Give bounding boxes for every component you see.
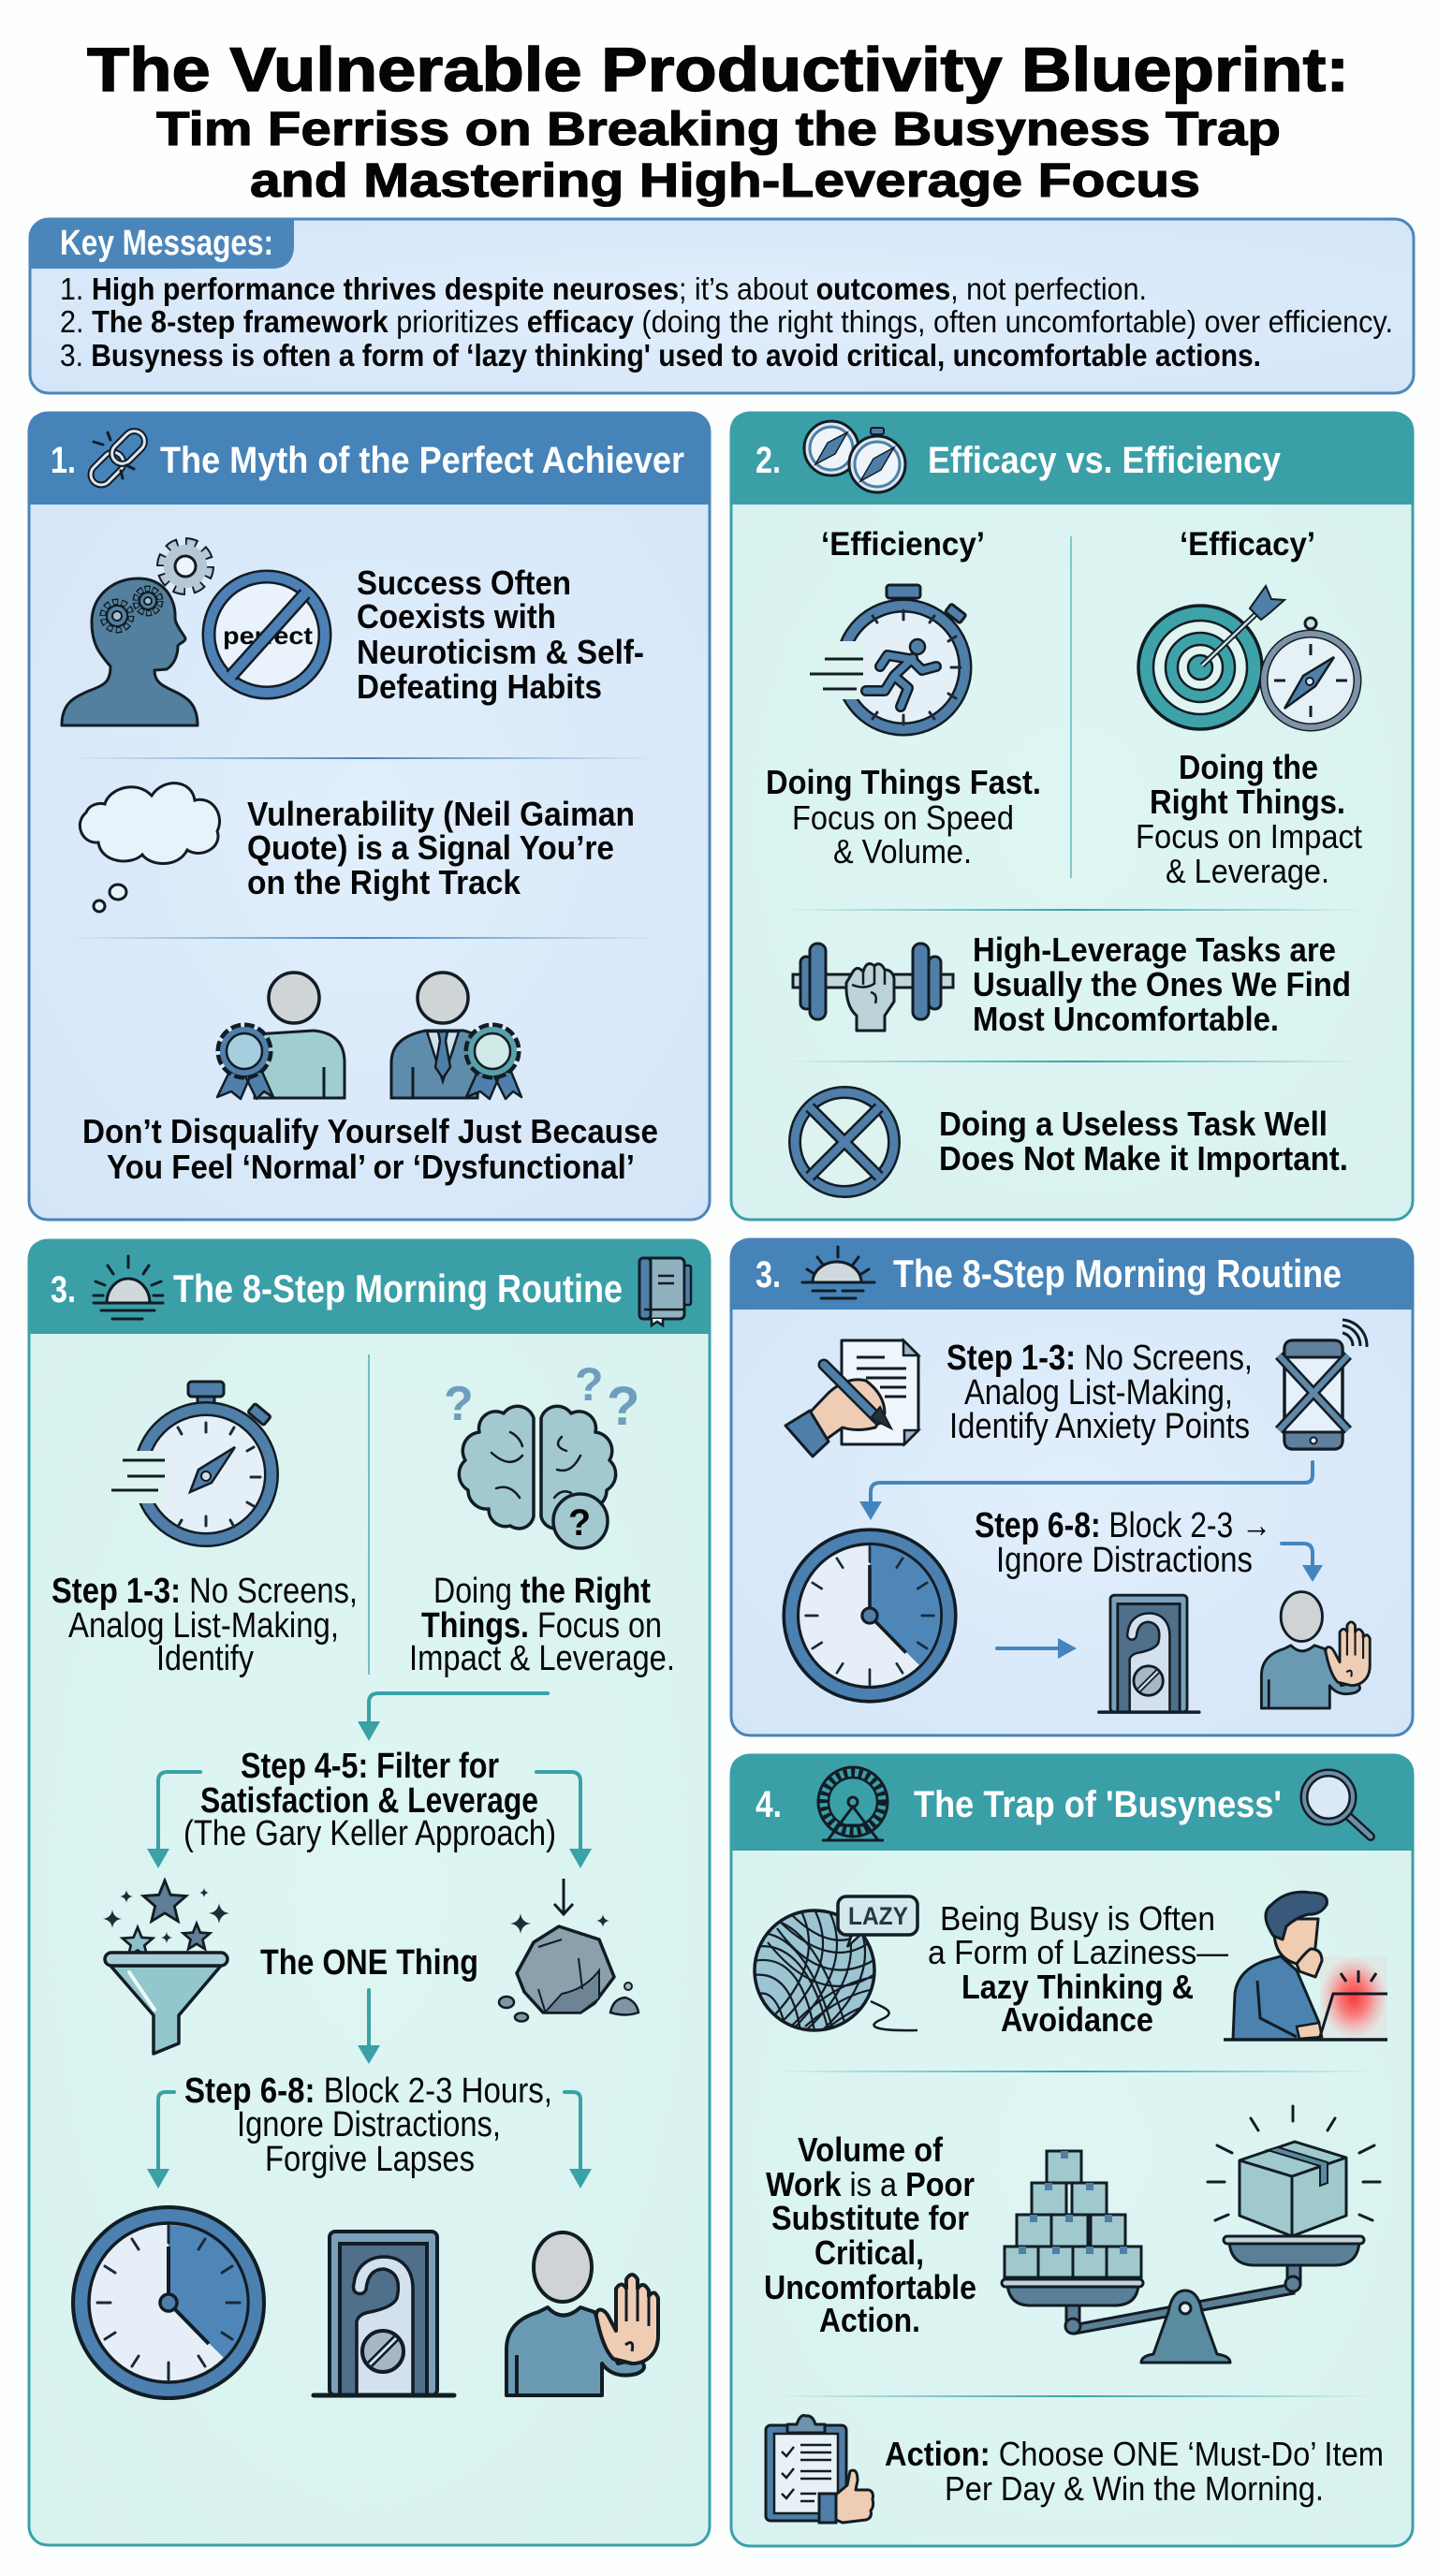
panel 2: efficacy vs efficiency: [730, 413, 1414, 1220]
panel 4 header: The Trap of 'Busyness': [914, 1784, 1282, 1825]
icon: ball of yarn with lazy tag: LAZY: [848, 1902, 908, 1930]
text: doing things fast: Focus on Speed: [792, 798, 1014, 837]
text: being busy: Being Busy is Often: [940, 1899, 1215, 1938]
text: vulnerability: [247, 795, 635, 901]
text: vulnerability: Quote) is a Signal You’re: [247, 828, 614, 867]
panel 3 right header: The 8-Step Morning Routine: [893, 1251, 1342, 1295]
icon: person with raised hand: [1261, 1592, 1370, 1708]
icon: target with arrow and compass: [1138, 586, 1357, 729]
icon: dumbbell in fist: [793, 944, 953, 1031]
text: high-leverage tasks: Usually the Ones We Find: [973, 965, 1351, 1003]
text: doing things fast: [766, 763, 1041, 871]
icon: distracted person at red laptop: [1224, 1892, 1387, 2040]
text: doing the right things: [409, 1572, 675, 1678]
text: don't disqualify yourself: You Feel ‘Normal’ or ‘Dysfunctional’: [107, 1148, 635, 1186]
panel 2 header: 2.: [756, 440, 781, 481]
icon: hamster wheel: [818, 1767, 888, 1840]
icon: sunrise: [94, 1256, 163, 1319]
text: doing the right things: [1136, 748, 1362, 890]
text: volume of work: Critical,: [814, 2233, 924, 2272]
key message lines: 1. High performance thrives despite neuroses; it’s about outcomes, not perfection.: [60, 271, 1147, 306]
panel 3 left header: [28, 1240, 710, 1334]
text: success often coexists: Neuroticism & Self-: [357, 633, 644, 671]
icon: twin compasses: [804, 421, 905, 492]
text: step 4-5: Step 4-5: Filter for: [241, 1747, 499, 1786]
text: doing things fast: & Volume.: [833, 832, 972, 871]
arrow: to person: [1282, 1544, 1323, 1582]
text: don't disqualify yourself: [82, 1112, 658, 1186]
icon: funnel with stars: [103, 1881, 229, 2054]
panel: key messages: [30, 219, 1414, 393]
icon: stopwatch with runner: [810, 585, 966, 729]
icon: door hanger: [1099, 1595, 1199, 1712]
heading: efficacy: ‘Efficacy’: [1180, 526, 1315, 563]
text: high-leverage tasks: [973, 930, 1351, 1038]
panel 3 right: the 8-step morning routine: [730, 1239, 1414, 1735]
title: [87, 35, 1349, 207]
text: volume of work: Work is a Poor: [766, 2165, 975, 2203]
text: doing the right things: Doing the: [1179, 748, 1318, 786]
icon: sunrise: [802, 1247, 874, 1298]
panel 1 header: [28, 413, 710, 505]
icon: scale with small boxes and one big box: [1002, 2106, 1380, 2363]
panel 3 right header: 3.: [756, 1254, 781, 1295]
text: step 1-3: Identify Anxiety Points: [949, 1407, 1250, 1446]
text: doing the right things: Impact & Leverage.: [409, 1639, 675, 1678]
text: step 1-3: Identify: [156, 1639, 254, 1678]
title: The Vulnerable Productivity Blueprint:: [87, 35, 1349, 104]
text: vulnerability: on the Right Track: [247, 863, 521, 901]
panel 3 left header: The 8-Step Morning Routine: [173, 1266, 623, 1310]
heading: efficiency: ‘Efficiency’: [821, 526, 985, 563]
icon: thought cloud: [80, 783, 220, 912]
icon: clipboard with thumbs up: [766, 2415, 873, 2523]
key message lines: 3. Busyness is often a form of ‘lazy thinking' used to avoid critical, uncomfortable actions.: [60, 338, 1261, 373]
panel 3 right header: [730, 1239, 1414, 1310]
text: step 1-3: Analog List-Making,: [68, 1606, 339, 1646]
panel 2 header: Efficacy vs. Efficiency: [928, 440, 1282, 481]
icon: broken chain: [86, 427, 149, 490]
text: doing the right things: Doing the Right: [433, 1572, 651, 1611]
text: doing the right things: Right Things.: [1150, 783, 1345, 821]
arrow: right branch to rock: [536, 1772, 592, 1868]
text: step 1-3: Step 1-3: No Screens,: [946, 1339, 1253, 1378]
text: being busy: Lazy Thinking &: [961, 1968, 1194, 2006]
text: high-leverage tasks: Most Uncomfortable.: [973, 1000, 1279, 1038]
text: high-leverage tasks: High-Leverage Tasks are: [973, 930, 1336, 969]
text: success often coexists: Defeating Habits: [357, 667, 602, 706]
key message lines: [60, 271, 1393, 373]
icon: magnifying glass: [1304, 1773, 1371, 1837]
text: vulnerability: Vulnerability (Neil Gaiman: [247, 795, 635, 833]
text: step 6-8: [975, 1506, 1271, 1580]
text: don't disqualify yourself: Don’t Disqualify Yourself Just Because: [82, 1112, 658, 1150]
text: the one thing: The ONE Thing: [260, 1943, 478, 1983]
arrow: right branch to person: [565, 2092, 592, 2188]
text: step 1-3: [946, 1339, 1253, 1446]
icon: two people with rosettes: [217, 973, 521, 1099]
text: volume of work: Action.: [819, 2301, 920, 2339]
icon: notebook: [639, 1258, 691, 1325]
icon: brain with question marks: ?: [607, 1376, 639, 1437]
panel 1 header: 1.: [51, 440, 76, 481]
icon: hand writing on paper: [785, 1340, 918, 1456]
title: and Mastering High-Leverage Focus: [250, 154, 1200, 207]
text: doing things fast: Doing Things Fast.: [766, 763, 1041, 801]
text: success often coexists: [357, 564, 644, 706]
text: step 6-8: Ignore Distractions: [996, 1541, 1253, 1580]
icon: brain with question marks: [444, 1358, 639, 1548]
text: doing a useless task well: Does Not Make it Important.: [939, 1139, 1348, 1178]
panel 1 header: The Myth of the Perfect Achiever: [160, 440, 684, 481]
icon: brain with question marks: ?: [568, 1502, 591, 1544]
text: step 1-3: Step 1-3: No Screens,: [51, 1572, 358, 1611]
arrow: left branch to clock: [147, 2092, 174, 2188]
text: action: Action: Choose ONE ‘Must-Do’ Item: [885, 2435, 1384, 2473]
icon: ball of yarn with lazy tag: [754, 1896, 917, 2033]
icon: clock: [73, 2207, 264, 2398]
text: volume of work: Uncomfortable: [764, 2268, 976, 2306]
text: step 6-8: Ignore Distractions,: [237, 2105, 501, 2144]
key messages tab: [30, 219, 294, 269]
text: step 4-5: [183, 1747, 556, 1853]
text: volume of work: Substitute for: [771, 2199, 969, 2237]
text: success often coexists: Coexists with: [357, 597, 556, 636]
arrow: clock to door: [997, 1638, 1077, 1659]
icon: crossed-out phone: [1279, 1320, 1367, 1449]
icon: person with raised hand: [506, 2232, 658, 2395]
arrow: left branch to funnel: [147, 1772, 200, 1868]
icon: head with gears and no-perfect sign: perfect: [223, 622, 313, 650]
panel 2 header: [730, 413, 1414, 505]
text: step 4-5: Satisfaction & Leverage: [200, 1781, 538, 1821]
panel 4 header: [730, 1755, 1414, 1851]
panel 3 left: the 8-step morning routine: [28, 1240, 710, 2545]
key message lines: 2. The 8-step framework prioritizes efficacy (doing the right things, often uncomfortable) over efficiency.: [60, 304, 1393, 339]
text: volume of work: [764, 2130, 976, 2339]
text: doing the right things: & Leverage.: [1166, 852, 1329, 890]
icon: rock: [499, 1879, 638, 2022]
text: success often coexists: Success Often: [357, 564, 571, 602]
text: doing the right things: Focus on Impact: [1136, 817, 1362, 856]
arrow: to step 4-5: [358, 1693, 548, 1741]
text: volume of work: Volume of: [798, 2130, 944, 2169]
text: step 6-8: [184, 2071, 552, 2179]
icon: crossed circle: [795, 1092, 894, 1192]
arrow: phone to clock: [859, 1462, 1313, 1520]
text: step 6-8: Step 6-8: Block 2-3 Hours,: [184, 2071, 552, 2111]
text: action: Per Day & Win the Morning.: [945, 2469, 1324, 2508]
text: doing a useless task well: [939, 1105, 1348, 1178]
text: action: [885, 2435, 1384, 2508]
text: step 6-8: Forgive Lapses: [265, 2140, 475, 2179]
text: being busy: a Form of Laziness—: [928, 1933, 1228, 1971]
text: step 1-3: Analog List-Making,: [964, 1373, 1233, 1412]
text: being busy: [928, 1899, 1228, 2039]
icon: door hanger: [314, 2232, 454, 2395]
icon: brain with question marks: ?: [444, 1377, 474, 1431]
panel 4 header: 4.: [756, 1784, 782, 1825]
panel 4: the trap of busyness: [730, 1755, 1414, 2546]
icon: head with gears and no-perfect sign: [62, 543, 325, 725]
panel 1: the myth of the perfect achiever: [28, 413, 710, 1220]
text: doing a useless task well: Doing a Useless Task Well: [939, 1105, 1328, 1143]
icon: stopwatch with compass needle: [111, 1382, 271, 1540]
panel 3 left header: 3.: [51, 1269, 76, 1310]
text: being busy: Avoidance: [1001, 2000, 1153, 2039]
text: doing the right things: Things. Focus on: [421, 1606, 662, 1646]
icon: brain with question marks: ?: [575, 1358, 604, 1411]
key messages heading: Key Messages:: [60, 224, 273, 263]
text: step 6-8: Step 6-8: Block 2-3 →: [975, 1506, 1271, 1545]
text: step 4-5: (The Gary Keller Approach): [183, 1814, 556, 1853]
arrow: to step 6-8: [358, 1990, 380, 2064]
title: Tim Ferriss on Breaking the Busyness Trap: [156, 102, 1281, 155]
icon: clock: [784, 1530, 956, 1702]
text: step 1-3: [51, 1572, 358, 1678]
